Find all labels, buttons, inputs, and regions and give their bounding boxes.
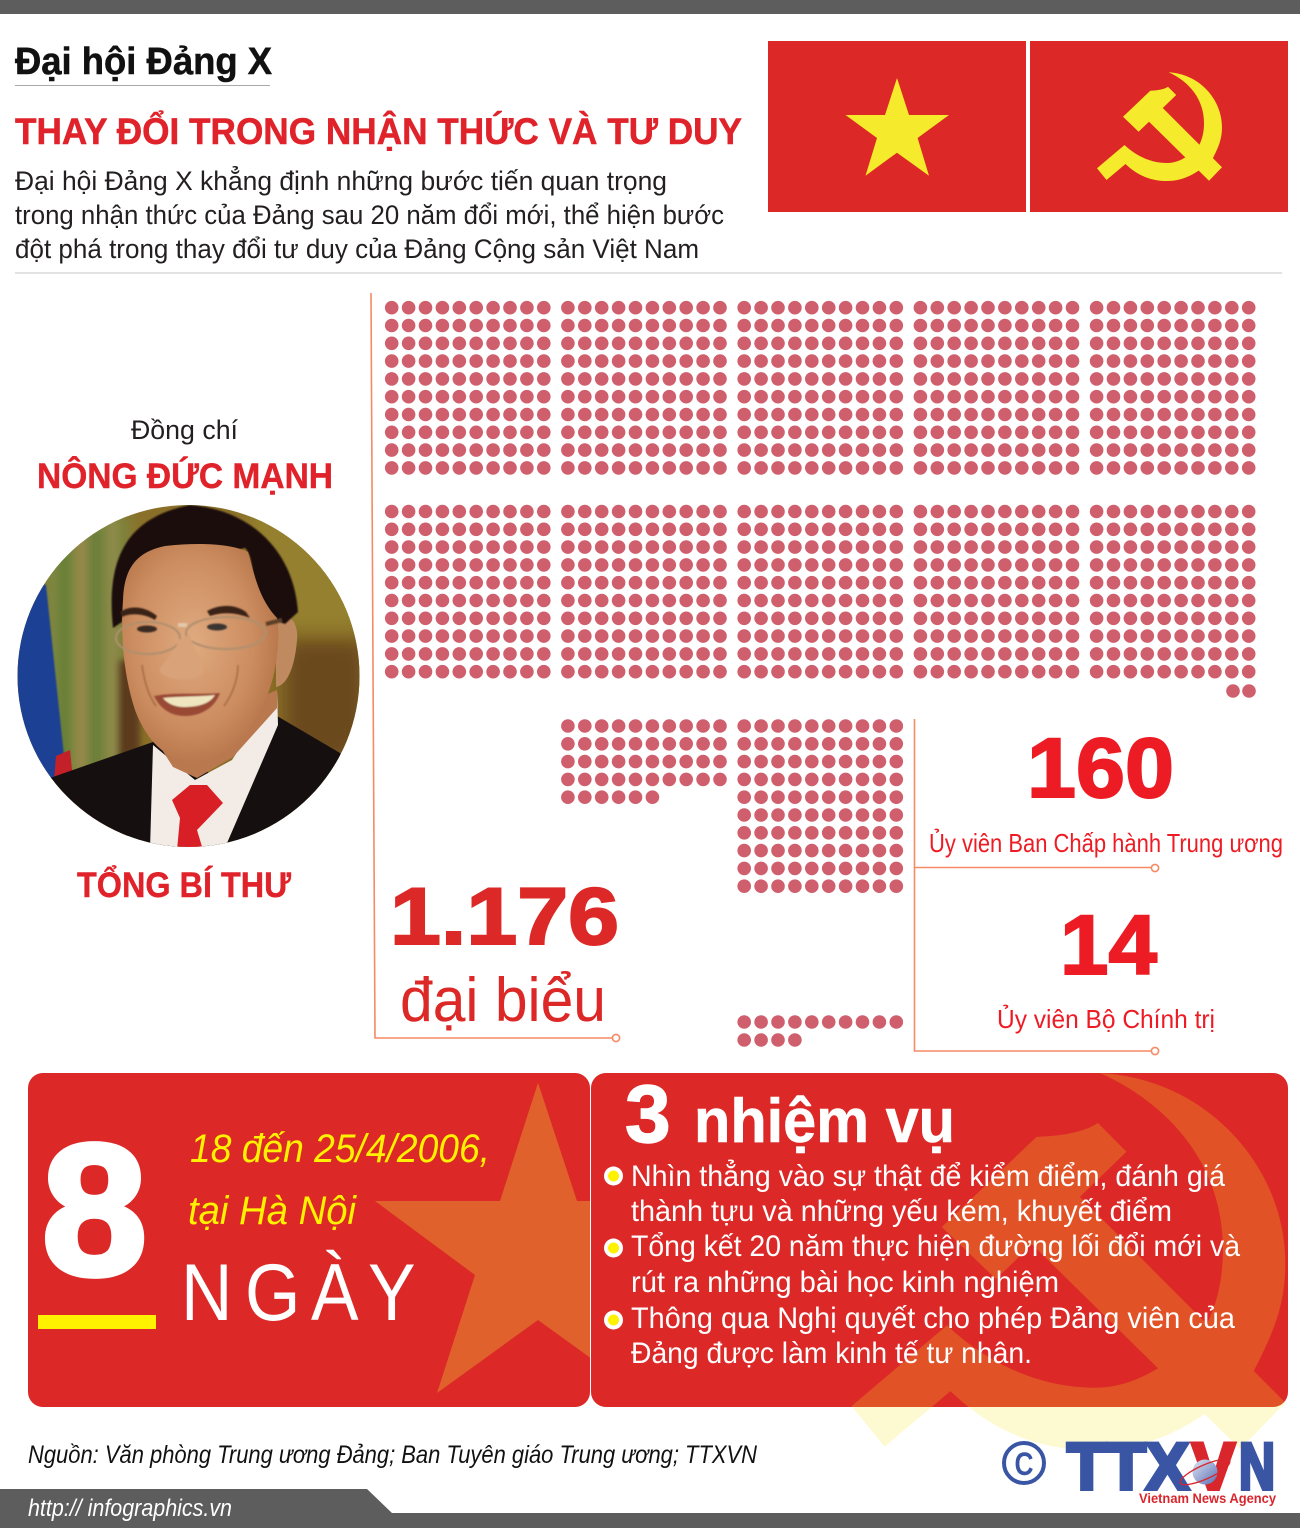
panel: 8 ngày: tại Hà Nội [188,1189,357,1233]
panel: 8 ngày [28,1073,590,1407]
stat: 1.176 đại biểu: đại biểu [400,966,606,1035]
task list: Thông qua Nghị quyết cho phép Đảng viên của [631,1302,1235,1335]
dot grid: delegates [385,301,1256,1047]
stat: 1.176 đại biểu [390,872,619,1035]
task list: Tổng kết 20 năm thực hiện đường lối đổi mới và [631,1230,1240,1263]
copyright mark [1004,1443,1044,1483]
NGÀY: NGÀY [181,1248,416,1338]
portrait caption: Đồng chí Nông Đức Mạnh: Đồng chí [131,415,238,445]
task list: rút ra những bài học kinh nghiệm [631,1266,1059,1299]
wordmark [1067,1429,1275,1503]
copyright mark: C [1014,1446,1034,1482]
dates: 18 đến 25/4/2006, [190,1127,490,1171]
tie [172,785,223,850]
task list: Nhìn thẳng vào sự thật để kiểm điểm, đánh giá [631,1159,1225,1193]
flag: Vietnam [768,41,1026,212]
intro paragraph: trong nhận thức của Đảng sau 20 năm đổi mới, thể hiện bước [15,200,724,230]
bullet icons [604,1166,623,1330]
footer bar [0,1489,1300,1528]
intro paragraph: Đại hội Đảng X khẳng định những bước tiến quan trọng [15,164,667,196]
stat: 1.176 đại biểu: 1.176 [390,872,619,962]
shirt [150,690,278,850]
panel: 3 nhiệm vụ [591,1069,1288,1450]
task list [631,1159,1240,1370]
stat: 14 Politburo: 14 [1060,898,1157,992]
agency name: Vietnam News Agency [1139,1491,1276,1506]
portrait photo [17,500,370,860]
wordmark: N [1239,1429,1275,1503]
stat: 160 Central Committee: 160 [1027,721,1174,815]
suit [51,716,341,847]
wordmark: V [1192,1429,1235,1503]
logo: TTXVN [1004,1429,1276,1506]
hammer and sickle watermark [852,1073,1285,1450]
wordmark: TTX [1067,1429,1189,1503]
portrait caption: Đồng chí Nông Đức Mạnh [37,415,333,496]
bracket lines: committee stats [914,719,1159,1055]
face [122,544,278,763]
yellow bar [38,1315,156,1329]
globe icon [1177,1455,1233,1489]
url: http:// infographics.vn [28,1495,232,1522]
flag: Communist Party [1030,41,1288,212]
bracket line: total delegates [371,293,620,1042]
top bar [0,0,1300,14]
header kicker: Đại hội Đảng X: Đại hội Đảng X [15,41,273,83]
hair [112,505,298,628]
stat: 14 Politburo [997,898,1215,1034]
portrait caption: Đồng chí Nông Đức Mạnh: NÔNG ĐỨC MẠNH [37,456,333,496]
portrait role: Tổng Bí Thư: TỔNG BÍ THƯ [77,865,292,905]
neck [157,690,277,778]
panel: 3 nhiệm vụ: nhiệm vụ [694,1087,955,1156]
number 8: 8 [42,1107,147,1314]
ear [276,615,297,687]
heading: 3 [625,1069,671,1160]
facial features [116,606,282,716]
intro paragraph [15,164,724,264]
stat: 14 Politburo: Ủy viên Bộ Chính trị [997,1003,1215,1034]
title: THAY ĐỔI TRONG NHẬN THỨC VÀ TƯ DUY [15,109,742,152]
source line: Nguồn: Văn phòng Trung ương Đảng; Ban Tuyên giáo Trung ương; TTXVN [28,1441,758,1469]
intro paragraph: đột phá trong thay đổi tư duy của Đảng Cộng sản Việt Nam [15,234,699,264]
task list: Đảng được làm kinh tế tư nhân. [631,1337,1032,1370]
stat: 160 Central Committee [929,721,1283,858]
task list: thành tựu và những yếu kém, khuyết điểm [631,1195,1172,1228]
star watermark [375,1083,590,1393]
